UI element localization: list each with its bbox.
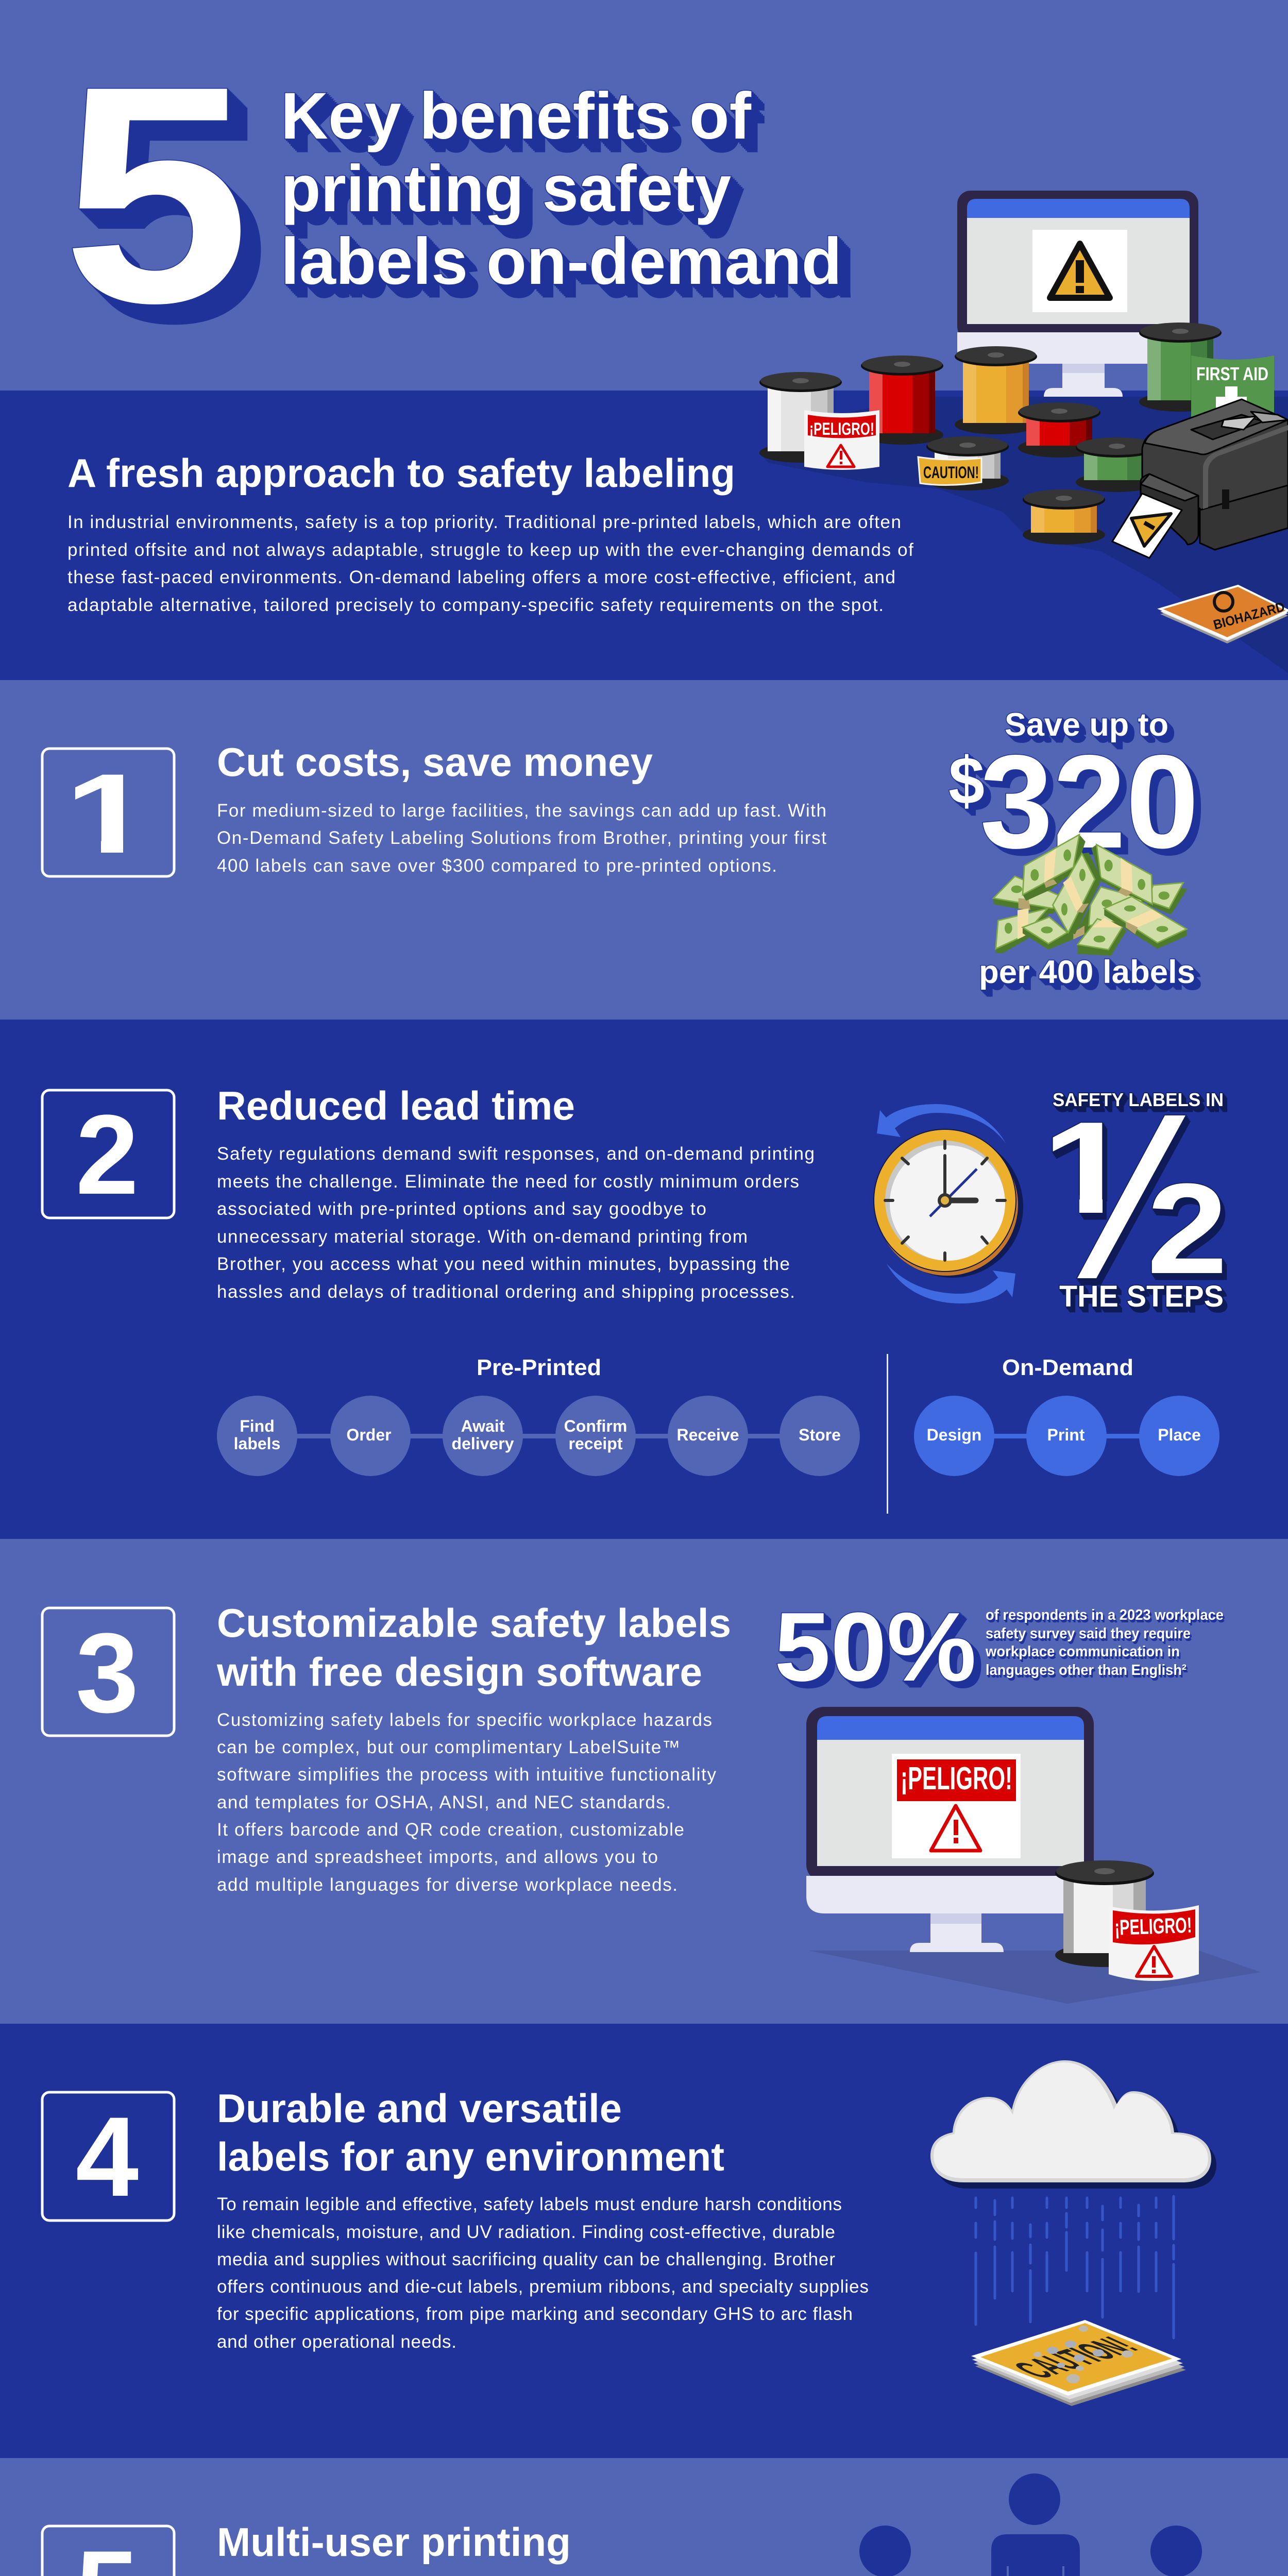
title: printing safety (281, 152, 731, 226)
illustration: floor shadow (759, 397, 1288, 673)
body 4: like chemicals, moisture, and UV radiation. Finding cost-effective, durable (217, 2222, 835, 2242)
stat: one half: 1 (1042, 1094, 1132, 1241)
title: Key benefits of (281, 79, 751, 153)
section background: benefit 3 (0, 1539, 1288, 2024)
body 3: and templates for OSHA, ANSI, and NEC standards. (217, 1792, 671, 1812)
label: peligro small: ¡PELIGRO! (1114, 1913, 1192, 1940)
icon: pile of money (993, 835, 1188, 956)
process: pre-printed steps: receipt (569, 1434, 623, 1453)
body 1: 400 labels can save over $300 compared to pre-printed options. (217, 856, 777, 876)
label: first aid (1191, 355, 1274, 428)
body 3: software simplifies the process with intuitive functionality (217, 1765, 716, 1785)
heading: a fresh approach: A fresh approach to safety labeling (67, 450, 735, 496)
big number 5: 5 (62, 22, 250, 367)
stat: per 400 labels: per 400 labels (979, 954, 1195, 990)
process: pre-printed steps: Await (461, 1417, 505, 1435)
spool: white, section 3 (1055, 1860, 1154, 1967)
heading 2: Reduced lead time (217, 1083, 575, 1128)
body 3: Customizing safety labels for specific workplace hazards (217, 1710, 712, 1730)
label: peligro small (1109, 1905, 1199, 1981)
biohazard label stack (1160, 586, 1288, 643)
body 4: and other operational needs. (217, 2332, 456, 2352)
spool: white tall (759, 372, 842, 463)
spool: red tall (861, 355, 943, 445)
body 4: offers continuous and die-cut labels, premium ribbons, and specialty supplies (217, 2277, 869, 2297)
intro body text (67, 512, 913, 615)
process: pre-printed steps: Receive (677, 1426, 739, 1444)
illustration: monitor with peligro label (806, 1707, 1261, 2004)
body 4: To remain legible and effective, safety labels must endure harsh conditions (217, 2194, 842, 2214)
caution sign stack with rain drops: CAUTION! (1002, 2332, 1149, 2383)
section background: hero top (0, 0, 1288, 391)
stat: save up to: Save up to (1005, 707, 1168, 743)
stat text: respondents: languages other than English² (986, 1662, 1187, 1679)
heading 3 (216, 1600, 731, 1694)
label: first aid: FIRST AID (1196, 363, 1268, 384)
body 2: unnecessary material storage. With on-demand printing from (217, 1227, 748, 1247)
spool: red short (1018, 402, 1100, 457)
stat: 320 dollars: 320 (980, 727, 1199, 876)
stat: the steps: THE STEPS (1059, 1280, 1224, 1313)
heading 4: Durable and versatile (217, 2086, 622, 2131)
stat: safety labels in: SAFETY LABELS IN (1053, 1089, 1224, 1110)
heading 1: Cut costs, save money (217, 739, 653, 785)
illustration: monitor with warning (957, 191, 1198, 397)
body 4: media and supplies without sacrificing quality can be challenging. Brother (217, 2249, 835, 2269)
icon: cloud (930, 2060, 1216, 2189)
process: on-demand steps: Print (1047, 1426, 1085, 1444)
intro body text: adaptable alternative, tailored precisely to company-specific safety requirements on the spot. (67, 595, 884, 615)
process: on-demand steps: Design (927, 1426, 981, 1444)
body 2: Brother, you access what you need within minutes, bypassing the (217, 1254, 790, 1274)
heading 3: with free design software (216, 1649, 702, 1694)
body 3 (217, 1710, 716, 1895)
heading: pre-printed: Pre-Printed (477, 1355, 601, 1380)
process: pre-printed steps: delivery (452, 1434, 514, 1453)
body 3: add multiple languages for diverse workplace needs. (217, 1875, 677, 1895)
process: on-demand steps: Place (1158, 1426, 1201, 1444)
stat: one half (1052, 1115, 1227, 1285)
intro body text: these fast-paced environments. On-demand labeling offers a more cost-effective, efficient, and (67, 567, 895, 587)
spool: yellow tall (955, 346, 1037, 434)
spool: yellow short (1023, 489, 1105, 545)
process: pre-printed steps: labels (234, 1434, 280, 1453)
number box 2: 2 (76, 1091, 139, 1218)
process: pre-printed steps: Find (240, 1417, 275, 1435)
section background: benefit 5 (0, 2458, 1288, 2576)
stat: one half: 2 (1147, 1157, 1228, 1300)
heading: on-demand: On-Demand (1002, 1355, 1133, 1380)
section background: benefit 4 (0, 2024, 1288, 2458)
process: pre-printed steps (217, 1396, 860, 1476)
stat text: respondents: safety survey said they require (986, 1625, 1191, 1642)
icon: clock with rotation arrows (874, 1104, 1023, 1303)
heading 4 (217, 2086, 724, 2179)
label: peligro: ¡PELIGRO! (809, 419, 874, 439)
label: caution: CAUTION! (923, 463, 979, 482)
caution sign stack with rain drops (971, 2320, 1186, 2406)
body 1: For medium-sized to large facilities, the savings can add up fast. With (217, 801, 826, 821)
heading 4: labels for any environment (217, 2134, 724, 2179)
number box 4: 4 (76, 2093, 139, 2220)
body 3: can be complex, but our complimentary LabelSuite™ (217, 1737, 680, 1757)
process: pre-printed steps: Confirm (564, 1417, 627, 1435)
title (281, 79, 842, 298)
icon: three users (841, 2473, 1221, 2576)
body 2 (217, 1144, 815, 1302)
title: labels on-demand (281, 225, 842, 298)
stat: 320 dollars: $ (948, 743, 985, 818)
number box 1 (42, 749, 174, 877)
heading 3: Customizable safety labels (217, 1600, 731, 1646)
stat text: respondents: workplace communication in (985, 1643, 1180, 1660)
number box 1: 1 (64, 750, 152, 877)
number box 2 (42, 1090, 174, 1218)
number box 5 (42, 2526, 174, 2576)
printed label coming out of the printer (1112, 494, 1182, 558)
spool: green tall (1139, 323, 1222, 412)
body 2: meets the challenge. Eliminate the need for costly minimum orders (217, 1172, 799, 1192)
body 3: It offers barcode and QR code creation, customizable (217, 1820, 684, 1840)
number box 3 (42, 1608, 174, 1736)
process: pre-printed steps: Order (346, 1426, 392, 1444)
stat: 50 percent: 50% (774, 1592, 976, 1702)
illustration: monitor with peligro label: ¡PELIGRO! (901, 1761, 1012, 1797)
number box 4 (42, 2092, 174, 2221)
stat text: respondents (985, 1607, 1224, 1679)
icon: rain (976, 2196, 1174, 2338)
body 2: Safety regulations demand swift responses, and on-demand printing (217, 1144, 815, 1164)
number box 3: 3 (76, 1609, 139, 1736)
body 2: associated with pre-printed options and say goodbye to (217, 1199, 706, 1219)
label: peligro (804, 410, 879, 470)
body 2: hassles and delays of traditional ordering and shipping processes. (217, 1282, 795, 1302)
intro body text: In industrial environments, safety is a top priority. Traditional pre-printed labels, which are often (67, 512, 901, 532)
intro body text: printed offsite and not always adaptable, struggle to keep up with the ever-changing demands of (67, 540, 913, 560)
section background: benefit 2 (0, 1020, 1288, 1539)
process: on-demand steps (914, 1396, 1219, 1476)
body 4 (217, 2194, 869, 2352)
spool: white short (926, 436, 1009, 490)
heading 5: Multi-user printing (217, 2519, 571, 2565)
spool: green short (1076, 437, 1158, 492)
section background: benefit 1 (0, 680, 1288, 1020)
body 1: On-Demand Safety Labeling Solutions from Brother, printing your first (217, 828, 826, 848)
stat text: respondents: of respondents in a 2023 workplace (986, 1607, 1224, 1623)
body 4: for specific applications, from pipe marking and secondary GHS to arc flash (217, 2304, 853, 2324)
label: caution (918, 457, 981, 485)
body 3: image and spreadsheet imports, and allows you to (217, 1847, 658, 1867)
body 1 (217, 801, 826, 876)
section background: intro (0, 391, 1288, 680)
printer: hero (1141, 399, 1288, 550)
process: pre-printed steps: Store (799, 1426, 841, 1444)
